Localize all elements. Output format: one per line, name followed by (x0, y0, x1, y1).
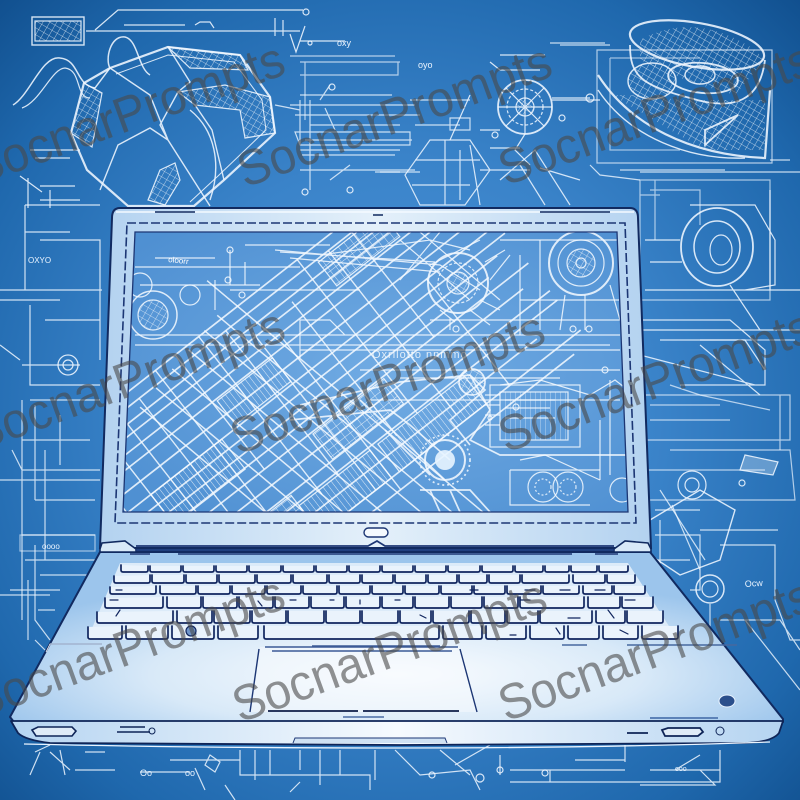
diagonal plan bands (124, 232, 582, 512)
watermark row 1: SocnarPrompts (230, 33, 559, 198)
laptop (10, 149, 783, 748)
gear left (128, 273, 200, 339)
bottom schematics: oo (185, 768, 195, 778)
palm rest line (50, 644, 737, 645)
right side schematics: Ocw (744, 578, 764, 589)
right ports (627, 728, 703, 736)
watermark row 2: SocnarPrompts (223, 300, 552, 465)
hinges (100, 541, 651, 552)
bottom schematics: ooo (675, 766, 687, 773)
drawing title text: Oxrilotto nnmmo (372, 349, 468, 361)
gear upper middle (428, 240, 510, 330)
title block top left: oxy (337, 38, 352, 48)
dashed bezel outline (115, 223, 636, 523)
laptop screen with blueprint (124, 232, 628, 512)
watermark row 3: SocnarPrompts (225, 568, 554, 733)
left side schematics (0, 205, 102, 650)
webcam badge (364, 528, 388, 537)
keyboard (87, 563, 678, 640)
small details left of helmet: oyo (418, 60, 433, 70)
laptop base deck (10, 541, 783, 722)
lower right gears (510, 455, 634, 505)
circuit chip panel (485, 367, 628, 480)
bottom schematics (30, 745, 720, 800)
title block top left (32, 9, 400, 120)
upper horizontal lines (135, 232, 620, 400)
cylinder drawing top right (550, 12, 800, 180)
left side schematics: OXYO (28, 256, 51, 265)
logo badge (650, 695, 735, 718)
connecting arm with pivot (290, 369, 628, 512)
right side schematics (640, 180, 800, 690)
laptop screen with blueprint: oloorr (168, 255, 189, 266)
key glyphs (110, 590, 635, 635)
gear upper right (453, 231, 620, 335)
left ports (32, 727, 150, 736)
bottom schematics: Oo (140, 768, 152, 778)
watermark row 3 (0, 565, 800, 733)
left side schematics: oooo (42, 542, 60, 551)
helmet drawing top left (13, 37, 275, 206)
small details left of helmet (20, 60, 433, 208)
watermark row 1 (0, 31, 800, 198)
laptop lid (100, 208, 651, 548)
central gear top (375, 45, 610, 205)
screen border (123, 232, 628, 512)
laptop front edge (11, 721, 783, 748)
watermark row 2 (0, 297, 800, 465)
touchpad (250, 646, 477, 717)
